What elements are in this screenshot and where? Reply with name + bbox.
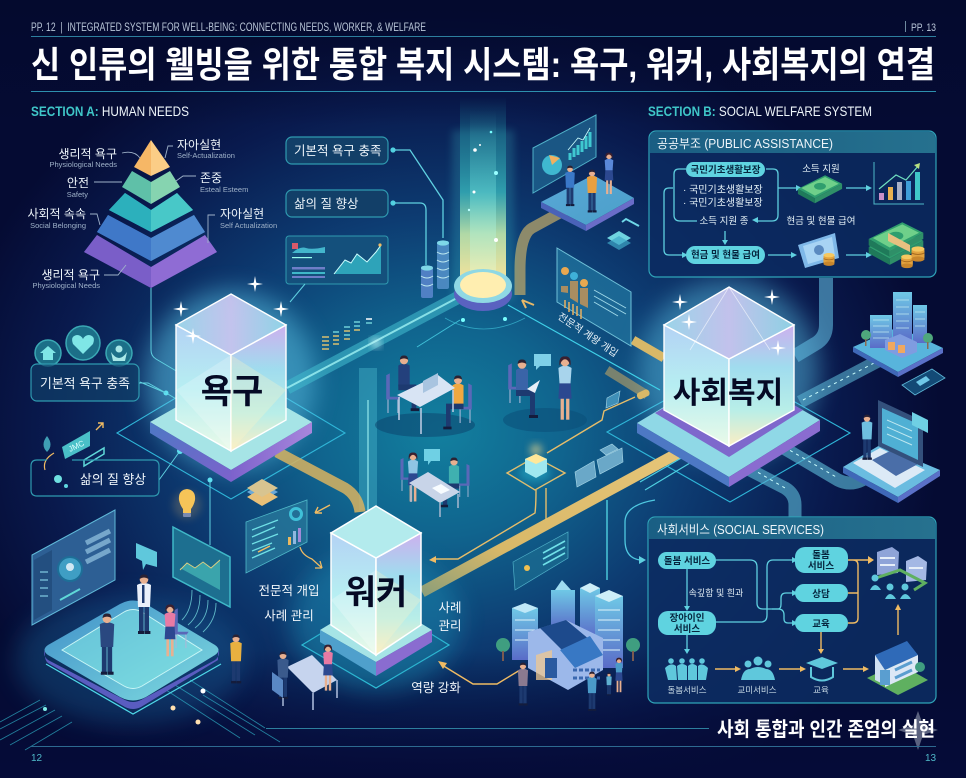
footer: 13 xyxy=(925,753,937,764)
icon: school building xyxy=(867,641,928,695)
icon: cash xyxy=(798,175,842,203)
flow: basic livelihood xyxy=(664,162,778,264)
connector lines and pathways xyxy=(0,210,880,750)
speech bubble xyxy=(136,543,157,570)
arrows near worker xyxy=(429,556,520,684)
pyramid of needs: Physiological Needs xyxy=(32,281,100,290)
stage: 워커 crystal xyxy=(320,506,432,676)
icon: banknote and coins xyxy=(798,233,839,268)
pyramid of needs xyxy=(27,138,277,290)
pyramid of needs: 생리적 욕구 xyxy=(58,147,117,161)
panel: social services: 돌봄서비스 xyxy=(667,685,707,695)
callout: quality of life: 삶의 질 향상 xyxy=(294,197,359,211)
pyramid layers xyxy=(84,140,217,288)
pyramid of needs: 사회적 속속 xyxy=(27,207,86,221)
left callout: quality of life: 삶의 질 향상 xyxy=(80,472,146,487)
stage: 욕구 crystal: 욕구 xyxy=(201,373,263,411)
left callout: basic needs fulfilment: 기본적 욕구 충족 xyxy=(40,376,130,391)
stage: 워커 crystal: 워커 xyxy=(345,574,407,612)
panel: social services: 속깊함 및 흰과 xyxy=(689,587,743,598)
pyramid of needs: Self-Actualization xyxy=(177,151,235,160)
labels around worker: 사례 관리 xyxy=(264,609,314,623)
panel: social services: 상담 xyxy=(812,588,830,600)
panel: social services: 서비스 xyxy=(808,560,834,572)
flow: basic livelihood: 소득 지원 종 xyxy=(700,216,749,227)
panel: social services: 돌봄 서비스 xyxy=(664,555,710,567)
footer: 12 xyxy=(31,753,43,764)
flow: basic livelihood: · 국민기초생활보장 xyxy=(683,196,763,209)
callout: quality of life xyxy=(286,190,426,265)
panel: public assistance: 공공부조 (PUBLIC ASSISTANCE) xyxy=(657,137,833,151)
icon: stack xyxy=(607,219,639,250)
dashboard screen xyxy=(32,510,115,625)
icon: money stack xyxy=(869,222,924,268)
panel: public assistance: 소득 지원 xyxy=(802,164,840,175)
pyramid of needs: Social Belonging xyxy=(30,221,86,230)
flow: basic livelihood: · 국민기초생활보장 xyxy=(683,183,763,196)
closing statement xyxy=(266,711,938,750)
section B heading: SECTION B: SOCIAL WELFARE SYSTEM xyxy=(648,103,872,119)
panel: public assistance: 현금 및 현물 급여 xyxy=(786,215,856,227)
top-right meeting platform xyxy=(533,115,639,250)
left callout: quality of life xyxy=(31,423,159,496)
panel: social services: 돌봄 xyxy=(812,550,830,561)
icon: light bulb xyxy=(173,489,201,519)
glowing gem node xyxy=(519,444,551,482)
pyramid of needs: 생리적 욕구 xyxy=(41,268,100,282)
running header xyxy=(31,21,936,37)
tablet card xyxy=(902,369,945,395)
icon: care group xyxy=(665,658,708,680)
small stack icon xyxy=(247,479,278,506)
document stacks xyxy=(575,391,623,487)
income chart xyxy=(874,162,924,204)
people-analytics panel xyxy=(522,248,631,360)
stage: 사회복지 crystal xyxy=(637,287,820,487)
panel: social services: 사회서비스 (SOCIAL SERVICES) xyxy=(657,523,824,537)
footer xyxy=(31,746,937,764)
panel: social services xyxy=(648,517,936,703)
pyramid of needs: 존중 xyxy=(200,171,222,185)
downtown campus xyxy=(496,532,640,711)
people-analytics panel: 전문적 계왕 개입 xyxy=(555,310,621,360)
dashboard near worker xyxy=(246,500,330,573)
flow: basic livelihood: 현금 및 현물 급여 xyxy=(691,249,760,261)
pyramid of needs: Physiological Needs xyxy=(49,160,117,169)
chart panel xyxy=(286,236,388,302)
small data ticks xyxy=(322,318,372,350)
stage: 욕구 crystal xyxy=(150,276,312,482)
labels around worker: 역량 강화 xyxy=(411,681,461,695)
icon: heart xyxy=(66,326,100,360)
panel: social services: 교육 xyxy=(812,619,830,630)
labels around worker xyxy=(259,584,462,695)
stage: 사회복지 crystal: 사회복지 xyxy=(673,377,783,410)
labels around worker: 전문적 개입 xyxy=(259,584,319,598)
laptop platform xyxy=(843,400,940,503)
speech bubble xyxy=(534,354,551,370)
left callout: basic needs fulfilment xyxy=(31,326,166,401)
people xyxy=(100,574,242,683)
pyramid of needs: Esteal Esteem xyxy=(200,185,248,194)
left callout: quality of life: JMC xyxy=(67,439,86,454)
icon: care xyxy=(106,340,132,366)
pyramid of needs: 안전 xyxy=(67,176,89,190)
pyramid of needs: 자아실현 xyxy=(220,207,264,221)
group at desk beside worker xyxy=(272,645,337,710)
panel: social services: 서비스 xyxy=(674,623,700,635)
meeting: laptop consultation xyxy=(375,355,475,437)
closing statement: 사회 통합과 인간 존엄의 실현 xyxy=(717,718,935,741)
consultation platform xyxy=(32,510,242,714)
panel: public assistance xyxy=(649,131,936,277)
icon: team xyxy=(741,656,775,680)
skyline platform xyxy=(853,292,945,395)
light beam and base xyxy=(452,97,514,311)
icon: house xyxy=(35,340,61,366)
callout: basic needs xyxy=(286,137,443,238)
icon: graduation cap xyxy=(806,657,838,680)
section A heading: SECTION A: HUMAN NEEDS xyxy=(31,103,189,119)
labels around worker: 관리 xyxy=(438,619,462,633)
flow lines xyxy=(684,556,901,672)
panel: social services: 장아이인 xyxy=(670,613,704,624)
panel: social services: 교육 xyxy=(813,685,829,695)
pyramid of needs: Self Actualization xyxy=(220,221,277,230)
panel: social services: 교미서비스 xyxy=(737,685,777,695)
running header: PP. 12 | INTEGRATED SYSTEM FOR WELL-BEING: CONNECTING NEEDS, WORKER, & WELFARE xyxy=(31,22,426,34)
arrows xyxy=(768,185,872,258)
chart screen xyxy=(173,527,230,632)
pyramid of needs: 자아실현 xyxy=(177,138,221,152)
running header: PP. 13 xyxy=(911,22,936,34)
flow: basic livelihood: 국민기초생활보장 xyxy=(691,164,761,176)
pyramid of needs: Safety xyxy=(67,190,88,199)
callout: basic needs: 기본적 욕구 충족 xyxy=(294,144,381,158)
meeting: table of two xyxy=(400,449,470,517)
meeting: reviewing documents xyxy=(503,354,587,432)
labels around worker: 사례 xyxy=(438,601,462,615)
data cylinders xyxy=(421,240,449,298)
icon: community buildings xyxy=(870,547,927,599)
